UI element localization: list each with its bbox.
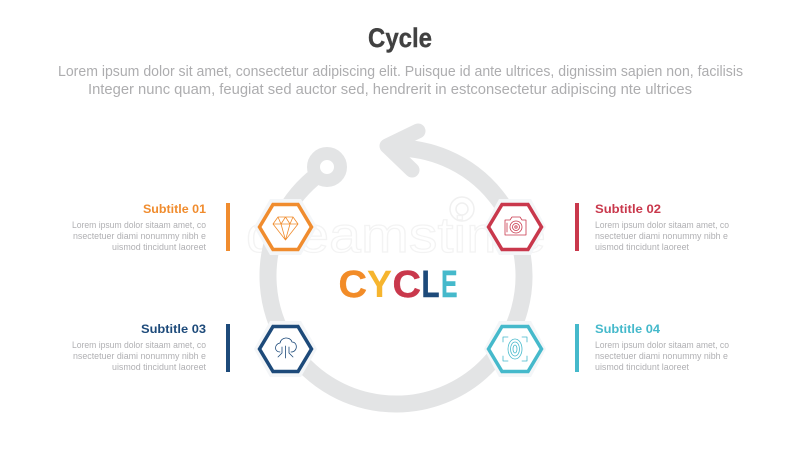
item 04 hexagon with fingerprint icon [484,321,546,377]
item 02 text: nsectetuer diami nonummy nibh e [595,231,728,241]
item 04 text: uismod tincidunt laoreet [595,362,690,372]
item 02 hexagon with camera icon [484,199,546,255]
item 01 text: nsectetuer diami nonummy nibh e [73,231,206,241]
item 04 bar [575,324,579,372]
intro text: Integer nunc quam, feugiat sed auctor sed, hendrerit in estconsectetur adipiscing nte ultrices [88,81,692,98]
item 03 text [72,324,207,372]
watermark: dreamstime [246,207,546,263]
title: Cycle [368,23,432,53]
item 03 bar [226,324,230,372]
center word CYCLE: Y [367,264,392,306]
center word CYCLE: E [441,264,458,306]
cycle arrow ring [268,131,524,404]
item 02 text [595,204,729,252]
center word CYCLE: C [392,264,421,306]
item 01 text: Subtitle 01 [143,204,207,216]
item 04 text: Subtitle 04 [595,324,661,336]
item 02 text: uismod tincidunt laoreet [595,242,690,252]
item 03 text: Lorem ipsum dolor sitaam amet, co [72,340,206,350]
item 01 hexagon with diamond icon [254,199,317,255]
center word CYCLE: L [422,264,440,306]
center word CYCLE: C [338,264,367,306]
item 02 bar [575,203,579,251]
center word CYCLE [338,264,458,306]
intro text [58,63,743,98]
item 03 text: uismod tincidunt laoreet [112,362,207,372]
intro text: Lorem ipsum dolor sit amet, consectetur adipiscing elit. Puisque id ante ultrices, dignissim sapien non, facilisis [58,63,743,80]
item 01 text: uismod tincidunt laoreet [112,242,207,252]
item 01 text [72,204,207,252]
item 04 text [595,324,729,372]
item 01 bar [226,203,230,251]
item 01 text: Lorem ipsum dolor sitaam amet, co [72,220,206,230]
item 02 text: Lorem ipsum dolor sitaam amet, co [595,220,729,230]
item 03 hexagon with cloud icon [254,321,317,377]
item 03 text: nsectetuer diami nonummy nibh e [73,351,206,361]
item 03 text: Subtitle 03 [141,324,206,336]
item 02 text: Subtitle 02 [595,204,661,216]
item 04 text: nsectetuer diami nonummy nibh e [595,351,728,361]
item 04 text: Lorem ipsum dolor sitaam amet, co [595,340,729,350]
